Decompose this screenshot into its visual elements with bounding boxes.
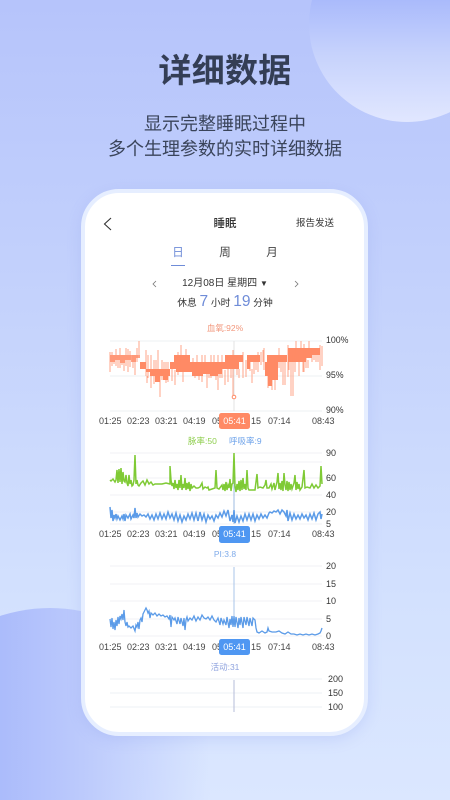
chart title: respiration: 呼吸率:9 bbox=[229, 436, 262, 446]
time axis: pulse and respiration: 04:19 bbox=[183, 529, 206, 539]
chart: activity bbox=[110, 678, 322, 712]
title: 详细数据 bbox=[158, 52, 292, 89]
time axis: PI bbox=[99, 642, 335, 652]
y axis: PI: 15 bbox=[326, 579, 336, 589]
time axis: blood oxygen bbox=[99, 416, 335, 426]
sleep duration: 休息 7 小时 19 分钟 bbox=[177, 293, 273, 310]
y axis: activity: 200 bbox=[328, 674, 343, 684]
time axis: PI: 01:25 bbox=[99, 642, 122, 652]
y axis: PI: 5 bbox=[326, 614, 331, 624]
decorative circle: top right bbox=[309, 0, 450, 122]
chart title: pulse: 脉率:50 bbox=[188, 436, 217, 446]
time axis: blood oxygen: 02:23 bbox=[127, 416, 150, 426]
y axis: PI bbox=[326, 561, 336, 641]
y axis: PI: 0 bbox=[326, 631, 331, 641]
time axis: blood oxygen: 04:19 bbox=[183, 416, 206, 426]
time axis: PI: 03:21 bbox=[155, 642, 178, 652]
y axis: pulse and respiration: 40 bbox=[326, 490, 336, 500]
tab underline bbox=[171, 265, 185, 266]
time axis: PI: 05 bbox=[212, 642, 222, 652]
time pill: PI: 05:41 bbox=[223, 642, 246, 652]
send report link: 报告发送 bbox=[296, 218, 334, 229]
y axis: PI: 20 bbox=[326, 561, 336, 571]
time pill: blood oxygen: 05:41 bbox=[223, 416, 246, 426]
date selector: 12月08日 星期四 ▼ bbox=[182, 278, 268, 289]
decorative circle: bottom left bbox=[0, 608, 210, 800]
time axis: pulse and respiration: 03:21 bbox=[155, 529, 178, 539]
time axis: pulse and respiration: 08:43 bbox=[312, 529, 335, 539]
time axis: blood oxygen: 05 bbox=[212, 416, 222, 426]
y axis: pulse and respiration bbox=[326, 448, 336, 529]
time axis: pulse and respiration bbox=[99, 529, 335, 539]
y axis: pulse and respiration: 20 bbox=[326, 507, 336, 517]
y axis: activity: 100 bbox=[328, 702, 343, 712]
tab: day: 日 bbox=[172, 247, 184, 259]
chart title: blood oxygen: 血氧:92% bbox=[207, 323, 243, 333]
tab: week: 周 bbox=[219, 247, 231, 259]
tab: month: 月 bbox=[266, 247, 278, 259]
y axis: PI: 10 bbox=[326, 596, 336, 606]
time axis: blood oxygen: 07:14 bbox=[268, 416, 291, 426]
screen heading: 睡眠 bbox=[214, 218, 236, 230]
time pill: pulse and respiration: 05:41 bbox=[223, 529, 246, 539]
subtitle bbox=[108, 114, 342, 159]
chart: blood oxygen bbox=[110, 340, 322, 412]
chart: pulse and respiration bbox=[109, 452, 323, 525]
time pill: blood oxygen bbox=[219, 413, 250, 429]
time pill: PI bbox=[219, 639, 250, 655]
time pill: pulse and respiration bbox=[219, 526, 250, 543]
time axis: pulse and respiration: 07:14 bbox=[268, 529, 291, 539]
y axis label 90: 90% bbox=[326, 405, 344, 415]
time axis: pulse and respiration: 02:23 bbox=[127, 529, 150, 539]
time axis: blood oxygen: 01:25 bbox=[99, 416, 122, 426]
panel: phone mockup bbox=[81, 189, 368, 736]
subtitle: 显示完整睡眠过程中 bbox=[144, 114, 306, 134]
time axis: blood oxygen: 03:21 bbox=[155, 416, 178, 426]
y axis: pulse and respiration: 5 bbox=[326, 519, 331, 529]
chart title: activity: 活动:31 bbox=[211, 662, 239, 672]
time axis: pulse and respiration: 15 bbox=[251, 529, 261, 539]
time axis: pulse and respiration: 01:25 bbox=[99, 529, 122, 539]
chart: PI bbox=[109, 566, 323, 636]
y axis: activity bbox=[328, 674, 343, 712]
time axis: pulse and respiration: 05 bbox=[212, 529, 222, 539]
y axis: blood oxygen: 100% bbox=[326, 335, 348, 345]
time axis: PI: 04:19 bbox=[183, 642, 206, 652]
y axis: pulse and respiration: 90 bbox=[326, 448, 336, 458]
y axis label 95: 95% bbox=[326, 370, 344, 380]
time axis: PI: 08:43 bbox=[312, 642, 335, 652]
time axis: PI: 02:23 bbox=[127, 642, 150, 652]
time axis: PI: 15 bbox=[251, 642, 261, 652]
y axis: activity: 150 bbox=[328, 688, 343, 698]
time axis: PI: 07:14 bbox=[268, 642, 291, 652]
y axis: pulse and respiration: 60 bbox=[326, 473, 336, 483]
chart title: PI: PI:3.8 bbox=[214, 549, 236, 559]
time axis: blood oxygen: 08:43 bbox=[312, 416, 335, 426]
time axis: blood oxygen: 15 bbox=[251, 416, 261, 426]
subtitle: 多个生理参数的实时详细数据 bbox=[108, 139, 342, 159]
